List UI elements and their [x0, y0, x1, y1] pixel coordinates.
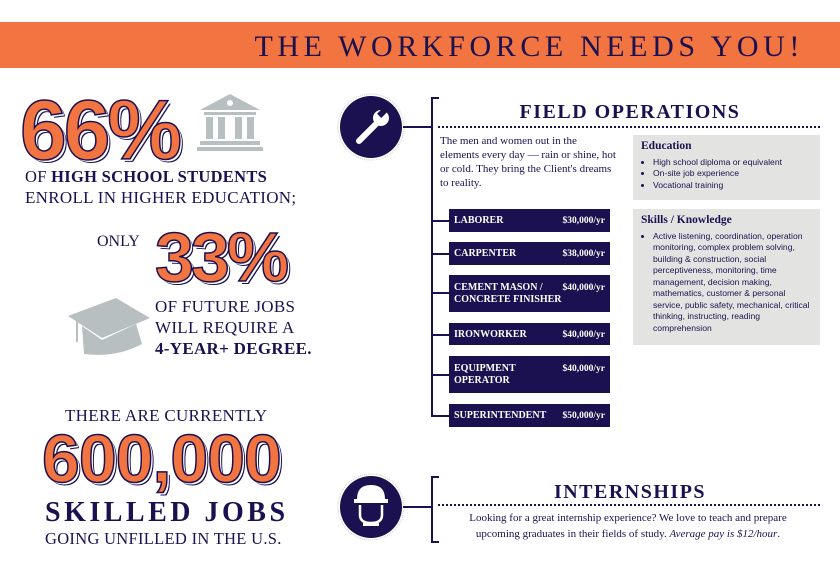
box: skills: Active listening, coordination, operation monitoring, complex problem solving, building & construction, social perceptiveness, monitoring, time management, decision making, mathematics, customer & personal service, public safety, mechanical, critical thinking, instructing, reading comprehension — [653, 230, 810, 332]
text: future jobs: WILL REQUIRE A — [155, 318, 295, 337]
icon: grad cap — [68, 298, 150, 355]
job list: OPERATOR — [454, 375, 510, 386]
box: education: High school diploma or equivalent — [653, 156, 782, 166]
text: future jobs: OF FUTURE JOBS — [155, 297, 295, 316]
job list: CEMENT MASON / — [454, 282, 543, 293]
panel: field operations — [338, 94, 820, 427]
icon: wrench circle — [338, 94, 404, 160]
box: skills: Skills / Knowledge — [641, 214, 732, 226]
box: education — [633, 135, 820, 200]
box: education: Education — [641, 140, 692, 152]
panel: internships — [338, 474, 820, 543]
job list: $40,000/yr — [563, 364, 605, 374]
text: only: ONLY — [97, 233, 140, 250]
text: high school — [25, 167, 296, 207]
heading: internships: INTERNSHIPS — [554, 481, 706, 503]
job list: $40,000/yr — [563, 330, 605, 340]
job list: EQUIPMENT — [454, 363, 516, 374]
box: skills — [633, 209, 820, 345]
job list: LABORER — [454, 215, 503, 226]
job list: $50,000/yr — [563, 411, 605, 421]
banner: THE WORKFORCE NEEDS YOU! — [254, 30, 804, 63]
job list: $38,000/yr — [563, 249, 605, 259]
stat 600,000: 600,000 — [42, 421, 281, 497]
job list: IRONWORKER — [454, 329, 527, 340]
text: there are currently: THERE ARE CURRENTLY — [65, 406, 267, 425]
text: description: The men and women out in the elements every day — rain or shine, hot or cold. They bring the Client's dreams to reality. — [440, 135, 616, 189]
stat 66%: 66% — [20, 83, 179, 177]
text: high school: ENROLL IN HIGHER EDUCATION; — [25, 188, 296, 207]
text: future jobs: 4-YEAR+ DEGREE. — [155, 339, 312, 358]
text: high school: OF HIGH SCHOOL STUDENTS — [25, 167, 267, 186]
heading: field operations: FIELD OPERATIONS — [520, 101, 740, 123]
job list: $30,000/yr — [563, 216, 605, 226]
stat 33%: 33% — [155, 218, 286, 296]
text: future jobs — [155, 297, 312, 358]
job list: CONCRETE FINISHER — [454, 294, 562, 305]
job list: CARPENTER — [454, 248, 516, 259]
job list — [433, 209, 610, 427]
box: education: Vocational training — [653, 180, 723, 190]
text: going unfilled: GOING UNFILLED IN THE U.S. — [45, 529, 282, 548]
icon: hard hat circle — [338, 474, 404, 540]
text: skilled jobs: SKILLED JOBS — [45, 497, 289, 528]
job list: $40,000/yr — [563, 283, 605, 293]
banner — [0, 22, 840, 68]
icon: building — [197, 94, 263, 151]
job list: SUPERINTENDENT — [454, 410, 546, 421]
text: internships: Looking for a great internship experience? We love to teach and prepare upcoming graduates in their fields of study. Average pay is $12/hour. — [469, 512, 787, 540]
box: education: On-site job experience — [653, 168, 739, 178]
